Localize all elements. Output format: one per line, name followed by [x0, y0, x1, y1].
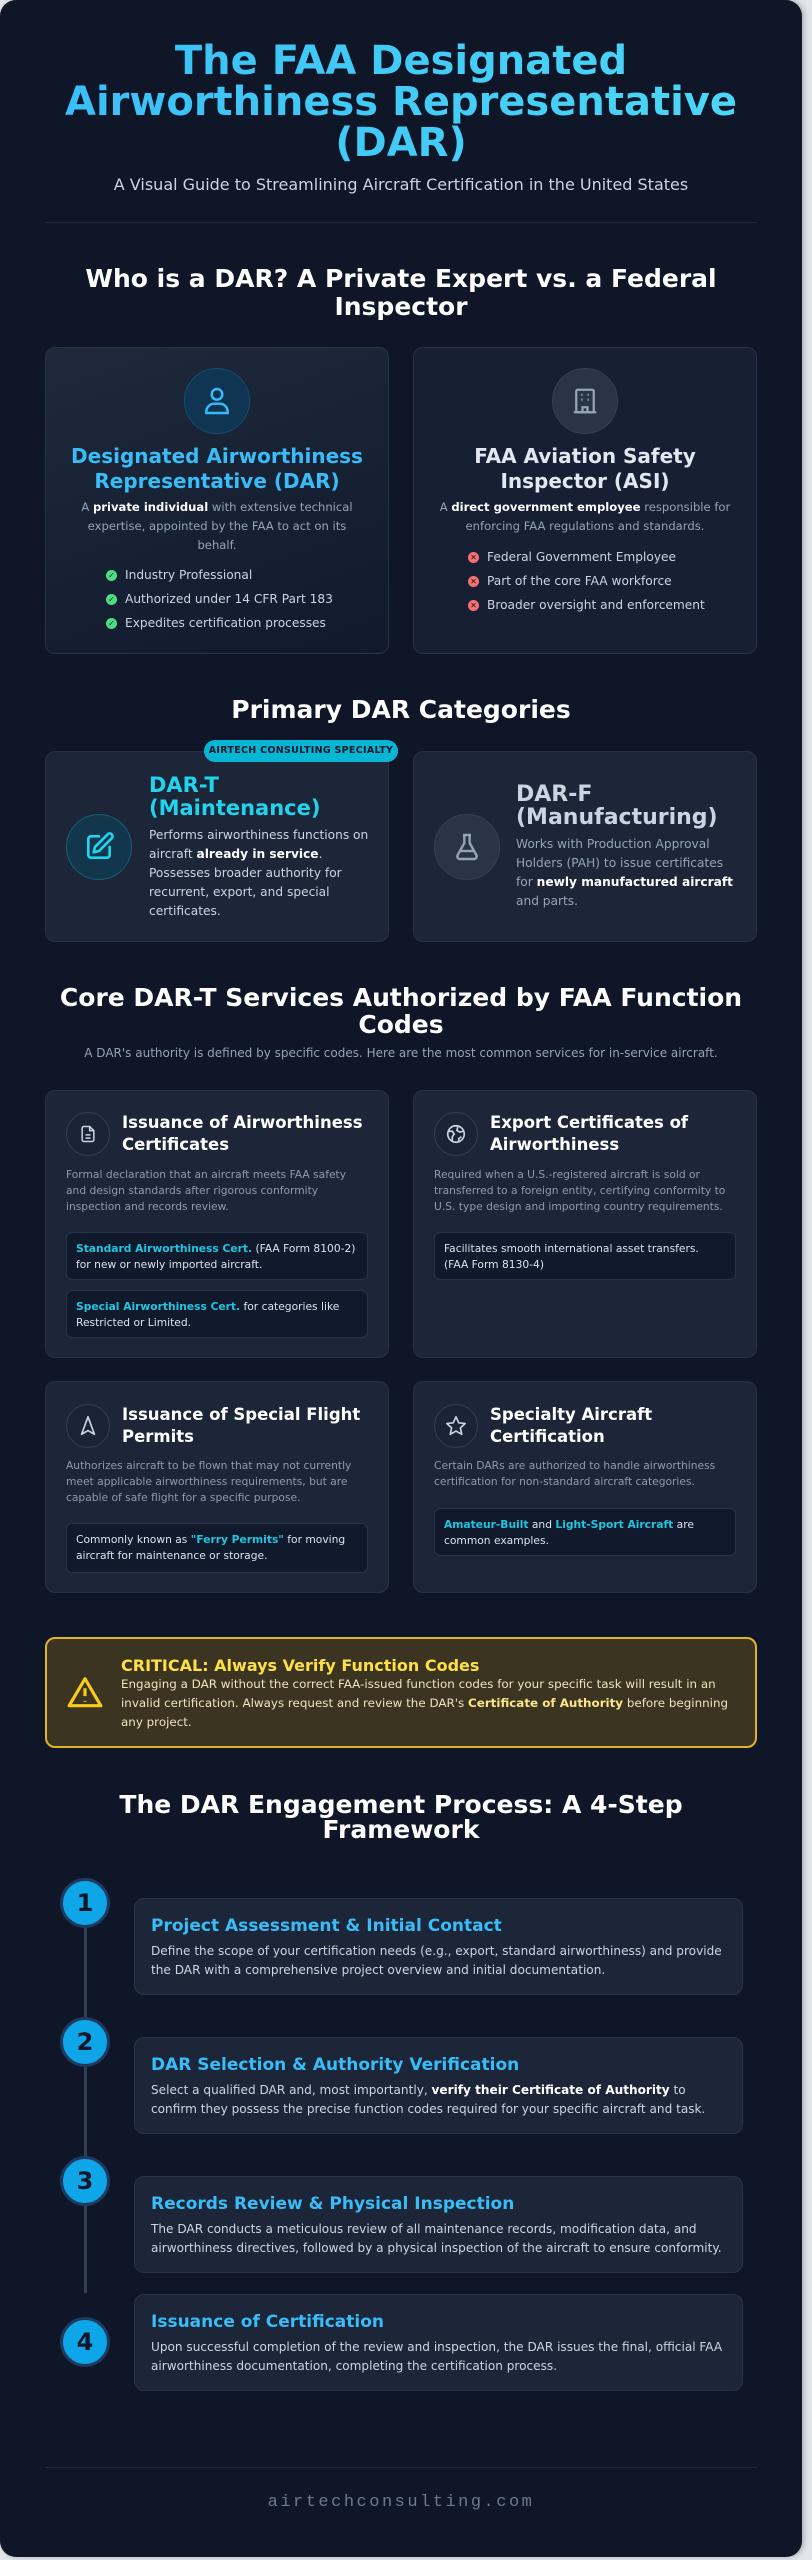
- title: [490, 1405, 652, 1446]
- title: [516, 782, 718, 830]
- step number 2: [60, 2017, 110, 2067]
- icon: building: [552, 368, 618, 434]
- box: standard: Standard Airworthiness Cert. (FAA Form 8100-2) for new or newly imported aircraft.: [76, 1242, 355, 1271]
- step number 1: [60, 1878, 110, 1928]
- list: DAR traits: Authorized under 14 CFR Part 183: [125, 592, 333, 606]
- step card 1: Define the scope of your certification needs (e.g., export, standard airworthiness) and provide the DAR with a comprehensive project overview and initial documentation.: [151, 1944, 722, 1977]
- step card 4: [134, 2294, 743, 2391]
- box: export: Facilitates smooth international asset transfers. (FAA Form 8130-4): [444, 1242, 699, 1271]
- box: standard: [66, 1232, 368, 1280]
- box: ferry permits: [66, 1523, 368, 1573]
- description: Formal declaration that an aircraft meets FAA safety and design standards after rigorous conformity inspection and records review.: [66, 1168, 346, 1213]
- title: [149, 773, 320, 820]
- warning text: Engaging a DAR without the correct FAA-issued function codes for your specific task will result in an invalid certification. Always request and review the DAR's Certificate of Authority before beginning any project.: [121, 1677, 728, 1729]
- step card 4: Issuance of Certification: [151, 2312, 384, 2332]
- description: Performs airworthiness functions on aircraft already in service. Possesses broader authority for recurrent, export, and special certificates.: [149, 828, 368, 918]
- heading: categories: Primary DAR Categories: [231, 695, 571, 724]
- panel: export certificates: [413, 1090, 757, 1358]
- step 1: [60, 1878, 743, 1995]
- list: ASI traits: Part of the core FAA workforce: [487, 574, 672, 588]
- list: ASI traits: Broader oversight and enforcement: [487, 598, 705, 612]
- list: DAR traits: [106, 568, 333, 630]
- panel: special flight permits: [45, 1381, 389, 1593]
- panel: specialty aircraft: [413, 1381, 757, 1593]
- description: A direct government employee responsible for enforcing FAA regulations and standards.: [440, 500, 730, 533]
- description: Works with Production Approval Holders (PAH) to issue certificates for newly manufactured aircraft and parts.: [516, 837, 733, 908]
- heading: core services: Core DAR-T Services Authorized by FAA Function Codes: [60, 983, 742, 1039]
- callout: critical warning: [45, 1637, 757, 1748]
- icon: person: [184, 368, 250, 434]
- title: Issuance of Special Flight: [122, 1405, 360, 1424]
- card title: FAA Aviation Safety: [474, 444, 696, 468]
- box: export: [434, 1232, 736, 1280]
- step card 1: Project Assessment & Initial Contact: [151, 1916, 502, 1936]
- step number 1: 1: [77, 1889, 93, 1917]
- footer: airtechconsulting.com: [268, 2493, 534, 2512]
- list: ASI traits: ✕: [470, 552, 477, 562]
- list: DAR traits: ✓: [108, 570, 115, 580]
- description: Authorizes aircraft to be flown that may not currently meet applicable airworthiness requirements, but are capable of safe flight for a specific purpose.: [66, 1459, 351, 1504]
- step 4: [60, 2294, 743, 2391]
- list: DAR traits: Industry Professional: [125, 568, 252, 582]
- list: ASI traits: ✕: [470, 576, 477, 586]
- step 3: [60, 2156, 743, 2273]
- title: (DAR): [335, 120, 467, 166]
- step card 2: DAR Selection & Authority Verification: [151, 2055, 519, 2075]
- step number 4: [60, 2317, 110, 2367]
- title: DAR-F: [516, 782, 592, 807]
- icon: warning: [68, 1677, 102, 1708]
- icon: flask: [434, 814, 500, 880]
- box: examples: Amateur-Built and Light-Sport Aircraft are common examples.: [444, 1518, 694, 1547]
- card title: [474, 444, 696, 493]
- panel: airworthiness certificates: [45, 1090, 389, 1358]
- step card 4: Upon successful completion of the review and inspection, the DAR issues the final, official FAA airworthiness documentation, completing the certification process.: [151, 2340, 722, 2373]
- title: DAR-T: [149, 773, 219, 797]
- list: ASI traits: ✕: [470, 600, 477, 610]
- box: examples: [434, 1508, 736, 1556]
- panel: DAR card: [45, 347, 389, 654]
- box: special: Special Airworthiness Cert. for categories like Restricted or Limited.: [76, 1300, 339, 1329]
- panel: DAR-T: [45, 751, 389, 942]
- title: Specialty Aircraft: [490, 1405, 652, 1424]
- step number 3: [60, 2156, 110, 2206]
- title: The FAA Designated: [175, 38, 627, 84]
- icon: globe: [434, 1112, 478, 1156]
- step number 2: 2: [77, 2028, 93, 2056]
- list: DAR traits: ✓: [108, 594, 115, 604]
- title: Certificates: [122, 1135, 229, 1154]
- step card 3: The DAR conducts a meticulous review of all maintenance records, modification data, and airworthiness directives, followed by a physical inspection of the aircraft to ensure conformity.: [151, 2222, 722, 2255]
- icon: star: [434, 1404, 478, 1448]
- description: A private individual with extensive technical expertise, appointed by the FAA to act on its behalf.: [81, 500, 353, 552]
- title: [490, 1113, 688, 1154]
- icon: document: [66, 1112, 110, 1156]
- step number 4: 4: [77, 2328, 93, 2356]
- badge: [204, 740, 398, 762]
- card title: Inspector (ASI): [500, 469, 670, 493]
- card title: [71, 444, 363, 493]
- title: Certification: [490, 1427, 605, 1446]
- step card 3: [134, 2176, 743, 2273]
- panel: DAR-F: [413, 751, 757, 942]
- title: [122, 1405, 360, 1446]
- title: Permits: [122, 1427, 194, 1446]
- icon: navigation: [66, 1404, 110, 1448]
- list: ASI traits: [468, 550, 705, 612]
- title: Airworthiness Representative: [65, 79, 737, 125]
- step card 2: Select a qualified DAR and, most importantly, verify their Certificate of Authority to confirm they possess the precise function codes required for your specific aircraft and task.: [151, 2083, 705, 2116]
- step card 1: [134, 1898, 743, 1995]
- warning title: CRITICAL: Always Verify Function Codes: [121, 1656, 479, 1675]
- box: ferry permits: Commonly known as "Ferry Permits" for moving aircraft for maintenance or storage.: [76, 1533, 345, 1562]
- title: [122, 1113, 363, 1154]
- timeline line: [84, 1903, 87, 2293]
- panel: ASI card: [413, 347, 757, 654]
- description: Certain DARs are authorized to handle airworthiness certification for non-standard aircraft categories.: [434, 1459, 715, 1488]
- step card 3: Records Review & Physical Inspection: [151, 2194, 514, 2214]
- box: special: [66, 1290, 368, 1338]
- heading: process: The DAR Engagement Process: A 4-Step Framework: [119, 1790, 683, 1844]
- subheading: A DAR's authority is defined by specific codes. Here are the most common services for in-service aircraft.: [84, 1046, 718, 1060]
- title: Issuance of Airworthiness: [122, 1113, 363, 1132]
- badge: AIRTECH CONSULTING SPECIALTY: [209, 745, 393, 756]
- title: Airworthiness: [490, 1135, 619, 1154]
- list: DAR traits: ✓: [108, 618, 115, 628]
- step 2: [60, 2017, 743, 2134]
- description: Required when a U.S.-registered aircraft is sold or transferred to a foreign entity, certifying conformity to U.S. type design and importing country requirements.: [434, 1168, 725, 1213]
- list: ASI traits: Federal Government Employee: [487, 550, 676, 564]
- subtitle: A Visual Guide to Streamlining Aircraft Certification in the United States: [114, 175, 688, 194]
- list: DAR traits: Expedites certification processes: [125, 616, 326, 630]
- title: [0, 41, 802, 164]
- heading: who is a DAR: Who is a DAR? A Private Expert vs. a Federal Inspector: [85, 264, 717, 321]
- title: (Maintenance): [149, 796, 320, 820]
- icon: pencil: [66, 814, 132, 880]
- card title: Designated Airworthiness: [71, 444, 363, 468]
- step number 3: 3: [77, 2167, 93, 2195]
- card title: Representative (DAR): [94, 469, 340, 493]
- title: (Manufacturing): [516, 805, 718, 830]
- step card 2: [134, 2037, 743, 2134]
- title: Export Certificates of: [490, 1113, 688, 1132]
